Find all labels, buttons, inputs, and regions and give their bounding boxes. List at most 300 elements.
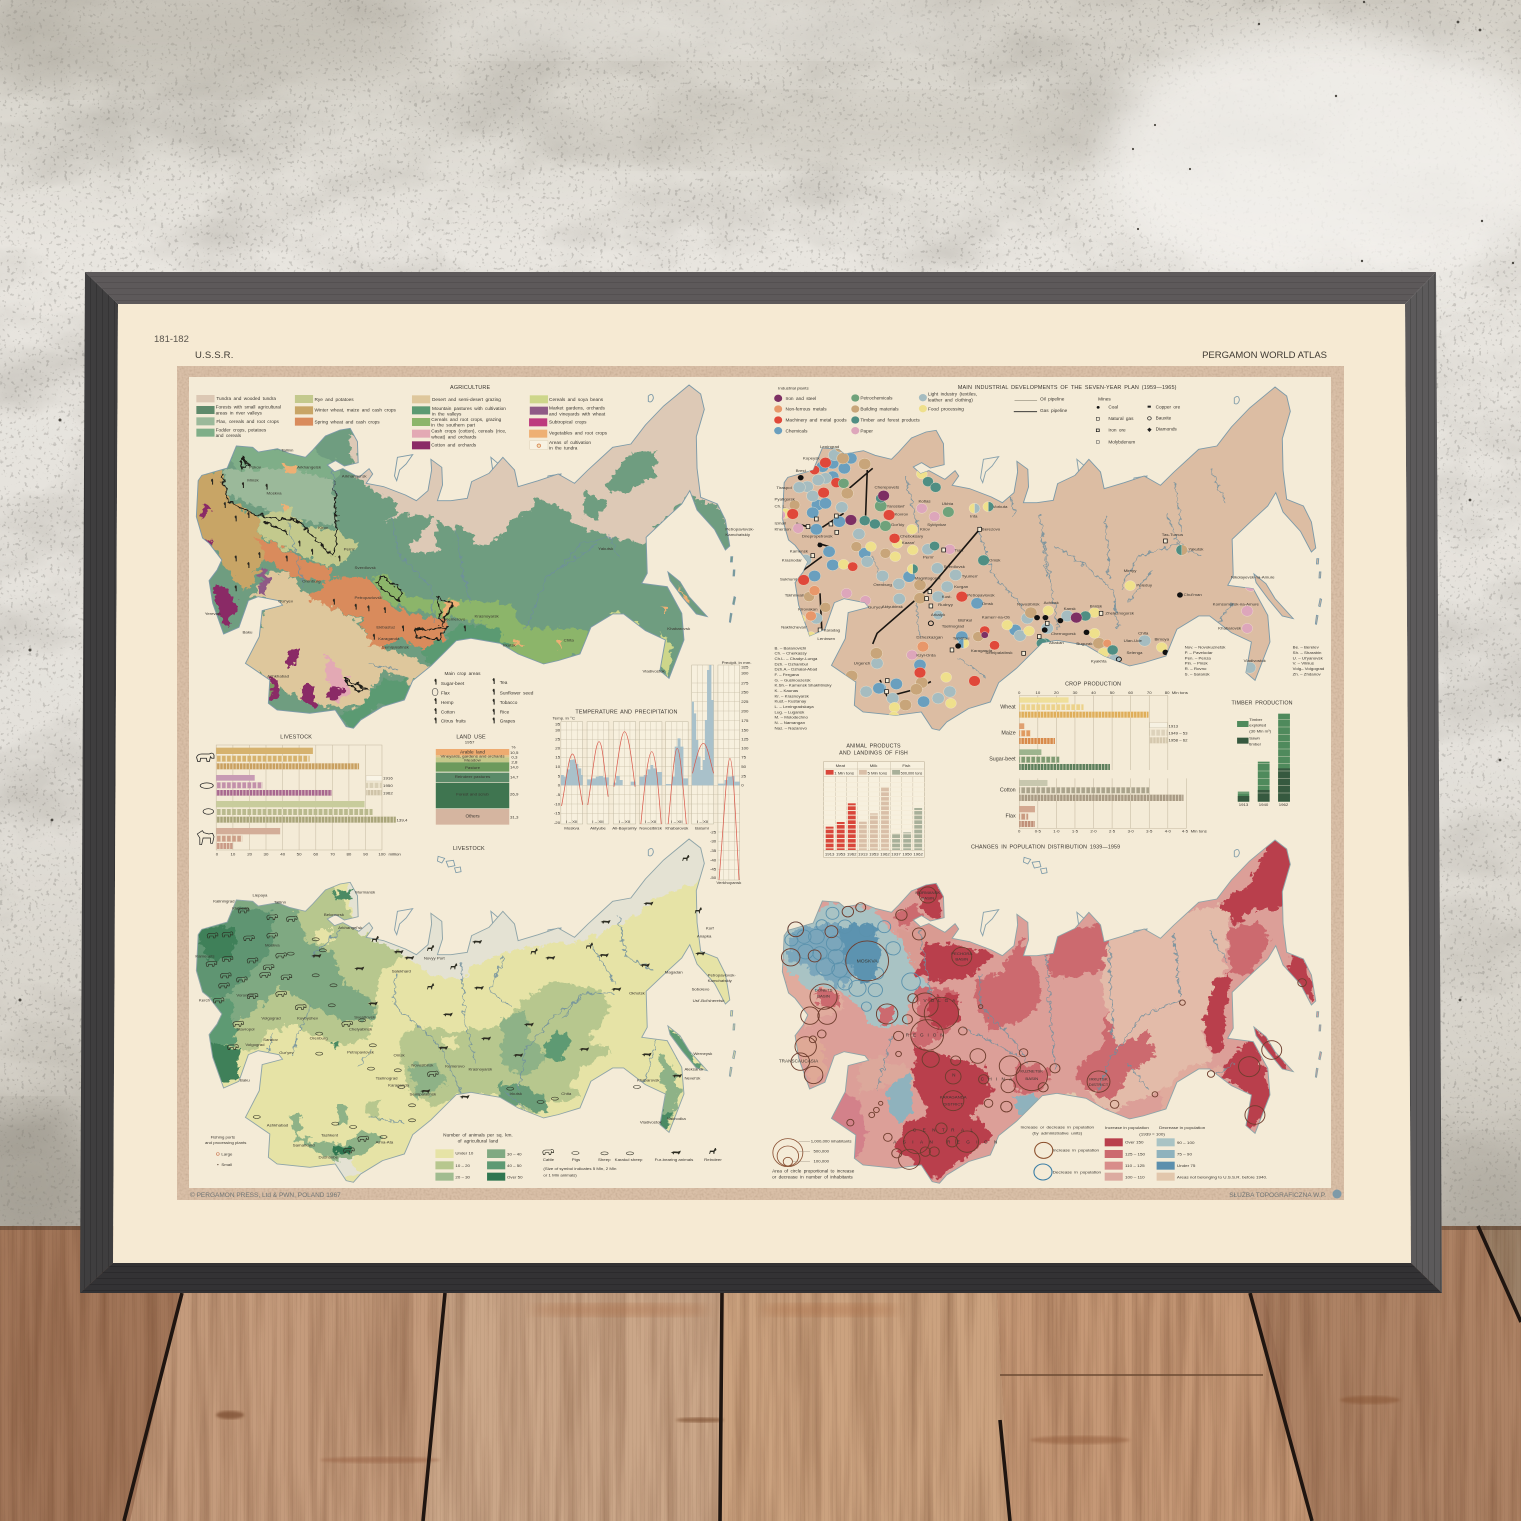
city labels: Syktyvkar (927, 522, 947, 527)
city labels: Temirtau (953, 635, 970, 640)
bar chart: animal products: 500,000 tons (901, 771, 922, 775)
climate charts: Ali-Bayramly (612, 826, 638, 831)
city labels: Saratov (263, 1037, 279, 1042)
crop symbol key: Sunflower seed (500, 691, 534, 696)
city labels: Ch. L. (775, 503, 786, 508)
legend: industrial plants (774, 386, 1181, 444)
climate charts: -40 (710, 857, 717, 862)
country heading: U.S.S.R. (195, 350, 234, 361)
city labels: Volgograd (261, 1015, 281, 1020)
city labels: Kopeysk (803, 456, 821, 460)
bar chart: crop production: Maize (1001, 731, 1016, 737)
legend: circle sizes: or decrease in number of inhabitants (772, 1175, 854, 1180)
bar chart: animal products: 1950 (902, 851, 913, 856)
legend: animals per sq km (435, 1133, 523, 1181)
agriculture legend: Winter wheat, maize and cash crops (315, 408, 397, 413)
climate charts: 175 (741, 718, 749, 723)
city labels: Tselinograd (942, 623, 965, 628)
agriculture city labels: Yakutsk (598, 546, 614, 551)
city labels: Belomorsk (324, 912, 345, 917)
bar chart: livestock: 90 (363, 852, 369, 857)
abbreviations list right: Volg– Volgograd (1293, 666, 1325, 671)
bar chart: animal products: Fish (902, 763, 911, 768)
agriculture city labels: Krasnoyarsk (475, 613, 500, 618)
city labels: Petropavlovsk (347, 1049, 375, 1054)
city labels: Bratsk (1090, 603, 1103, 608)
abbreviations list right (1185, 645, 1325, 676)
city labels: Kotlas (919, 498, 931, 503)
legend: animals per sq km: of agricultural land (458, 1139, 499, 1143)
city labels: Bishkul (958, 618, 972, 623)
bar chart: animal products: 1937 (891, 851, 902, 856)
city labels: Nakhodka (667, 1116, 687, 1121)
climate charts: 275 (741, 681, 749, 685)
picture frame (80, 272, 1442, 1293)
legend: industrial plants: Diamonds (1156, 427, 1178, 432)
heading: population changes: CHANGES IN POPULATION DISTRIBUTION 1939—1959 (971, 845, 1120, 851)
city labels: Kansk (1064, 606, 1077, 611)
city labels: Dushanbe (319, 1154, 339, 1159)
city labels: Vladivostok (640, 1119, 663, 1124)
legend: industrial plants: Chemicals (785, 429, 808, 433)
legend: animals per sq km: 30 – 40 (507, 1152, 522, 1156)
fishing ports key: Small (221, 1162, 232, 1167)
agriculture city labels: Ekibastuz (376, 624, 395, 629)
bar chart: livestock: million (389, 852, 402, 857)
heading: livestock chart: LIVESTOCK (280, 735, 312, 740)
legend: population change colours: Increase in population (1105, 1125, 1150, 1130)
stacked chart: land use: Forest and scrub (456, 792, 490, 797)
agriculture regions (196, 386, 735, 728)
stacked chart: land use: 14,7 (510, 775, 519, 779)
bar chart: animal products: 1962 (880, 851, 890, 856)
city labels: Perm' (923, 554, 934, 559)
legend: animals per sq km: 20 – 30 (455, 1175, 471, 1179)
agriculture legend: Forests with small agricultural (216, 405, 281, 410)
city labels: Ashkhabad (267, 1123, 289, 1128)
city labels: Karaganda (388, 1083, 410, 1088)
city labels: Ust'-Bol'sheretsk (693, 998, 725, 1003)
agriculture legend (196, 395, 608, 450)
city labels: Korf (706, 925, 715, 930)
city labels: Karaganda (971, 648, 993, 653)
city labels: Salekhard (392, 969, 412, 974)
legend: industrial plants: leather and clothing) (928, 398, 973, 402)
paper mat (113, 304, 1411, 1263)
city labels: Bugurak (1076, 641, 1093, 646)
bar chart: crop production: 4·0 (1165, 829, 1172, 834)
stacked chart: land use: Pasture (465, 765, 481, 770)
abbreviations list left: G. – Gusinoozersk (775, 677, 812, 682)
agriculture city labels: Pskov (249, 465, 262, 469)
legend: industrial plants: Building materials (860, 407, 899, 412)
icon: pig (200, 783, 213, 788)
legend: industrial plants: Paper (860, 429, 873, 433)
legend: population change colours: Decrease in population (1159, 1125, 1206, 1130)
agriculture city labels: Kirov (318, 525, 329, 530)
stacked chart: land use: 10,5 (510, 750, 519, 755)
bar chart: timber production: exploited (1249, 723, 1267, 728)
agriculture legend: Tundra and wooded tundra (216, 396, 276, 401)
legend: animal symbols: Fur-bearing animals (655, 1157, 693, 1162)
legend: population change colours: (1939 = 100) (1139, 1132, 1166, 1136)
climate charts: 150 (741, 728, 749, 732)
agriculture city labels: Vladivostok (642, 668, 666, 673)
city labels: Okhotsk (629, 990, 646, 995)
city labels: Komsomol'sk-na-Amure (1213, 601, 1260, 606)
city labels: Kirovakan (798, 607, 818, 612)
heading: animal products: AND LANDINGS OF FISH (839, 751, 908, 757)
region labels: CENTRAL (913, 1128, 979, 1133)
abbreviations list left: K. – Kaunas (775, 688, 798, 693)
legend: animal symbols: (Size of symbol indicates 5 Mln, 2 Mln (543, 1166, 617, 1171)
climate charts: Temp. in °C (553, 716, 575, 720)
city labels: Krasnoyarsk (468, 1067, 493, 1072)
stacked chart: land use: % (512, 745, 516, 749)
climate charts: Verkhoyansk (716, 880, 742, 885)
city labels: Kurgan (954, 584, 969, 589)
city labels: Cherepovets (875, 485, 899, 490)
legend: industrial plants: Bauxite (1156, 416, 1172, 421)
bar chart: crop production: 4·5 (1182, 829, 1189, 834)
agriculture city labels: Petropavlovsk (355, 595, 383, 600)
city labels: Izmail (775, 520, 786, 525)
agriculture city labels: Khabarovsk (667, 626, 691, 631)
heading: animal products (839, 743, 908, 757)
city labels: Kirov (920, 527, 931, 532)
bar chart: livestock: 1962 (383, 790, 393, 795)
city labels: Tashkent (321, 1133, 339, 1138)
climate charts: -45 (710, 867, 717, 872)
bar chart: timber production: timber (1249, 741, 1262, 746)
crop symbol key: Tea (500, 680, 508, 685)
climate charts: -15 (554, 811, 561, 816)
climate charts: 0 (558, 783, 561, 788)
agriculture legend: and cereals (216, 433, 242, 438)
bar chart: crop production: 3·0 (1128, 829, 1134, 834)
bar chart: timber production: Timber (1249, 717, 1263, 722)
city labels: Zheleznogorsk (1105, 611, 1135, 616)
heading: animal products: ANIMAL PRODUCTS (846, 743, 901, 749)
city labels: Kazan' (902, 540, 915, 545)
legend: animals per sq km: Number of animals per sq. km. (443, 1133, 513, 1138)
bar chart: crop production: Cotton (1000, 788, 1016, 794)
legend: animal symbols: Karakul sheep (615, 1157, 643, 1162)
abbreviations list right: S. – Saransk (1185, 671, 1211, 676)
city labels: Novosibirsk (411, 1063, 434, 1068)
icon: survey emblem (1332, 1190, 1342, 1198)
agriculture city labels: Arkhangel'sk (342, 474, 368, 479)
agriculture legend: Spring wheat and cash crops (315, 420, 380, 424)
agriculture legend: Areas of cultivation (549, 440, 592, 445)
abbreviations list left: Naz. – Nazarovo (775, 725, 808, 730)
city labels: Gur'yev (868, 605, 884, 610)
wooden floor (0, 1226, 1521, 1521)
city labels: Vladivostok (1244, 658, 1267, 663)
abbreviations list left (775, 645, 833, 730)
city labels: Chita (1138, 630, 1149, 635)
city labels: Karadag (824, 627, 841, 632)
legend: industrial plants: Mines (1098, 397, 1111, 402)
climate charts: I – XII (566, 819, 577, 824)
bar chart: crop production (989, 690, 1207, 834)
city labels: Abakan (1049, 640, 1065, 645)
agriculture city labels: Irkutsk (503, 643, 517, 648)
legend: population change colours: 125 – 150 (1125, 1152, 1146, 1156)
panel: livestock map (196, 838, 736, 1183)
city labels: Dnepropetrovsk (802, 534, 833, 539)
region labels: DISTRICT (943, 1101, 964, 1106)
panel: agriculture map (180, 370, 762, 737)
bar chart: livestock: 100 (378, 852, 386, 857)
abbreviations list left: B. – Baranovichi (775, 645, 806, 650)
agriculture legend: in the southern part (431, 423, 476, 428)
bar chart: livestock: 60 (313, 852, 319, 857)
abbreviations list left: F. – Fergana (775, 672, 800, 677)
legend: administrative increase or decrease (1020, 1125, 1102, 1180)
city labels: Sobolevo (692, 987, 710, 992)
abbreviations list left: L. – Leningradskaya (775, 704, 814, 709)
city labels: Kamen'-na-Ob (982, 615, 1011, 620)
city labels: Kherson (775, 527, 791, 532)
climate charts: I – XII (619, 819, 630, 824)
city labels: Ulan-Ude (1124, 638, 1143, 643)
legend: animals per sq km: Under 10 (455, 1151, 474, 1156)
decrease circles (785, 907, 920, 1011)
region labels: KARAGANDA (940, 1095, 967, 1100)
bar chart: crop production: Flax (1006, 814, 1016, 820)
islands (395, 848, 653, 939)
legend: animal symbols: Cattle (543, 1157, 555, 1162)
land base (782, 387, 1322, 730)
city labels: Khabarovsk (637, 1078, 660, 1083)
agriculture legend: wheat) and orchards (431, 435, 477, 439)
climate charts: 50 (741, 764, 747, 769)
legend: industrial plants: Gas pipeline (1040, 408, 1068, 413)
city labels: Ukhta (942, 501, 954, 506)
climate charts: Precipit. in mm. (722, 660, 752, 665)
region labels: REGION (906, 1033, 948, 1038)
cartographer line: SŁUŻBA TOPOGRAFICZNA W.P. (1229, 1190, 1326, 1199)
agriculture legend: and vineyards with wheat (549, 412, 606, 416)
legend: circle sizes: 500,000 (814, 1149, 830, 1154)
city labels: Orenburg (873, 582, 893, 587)
legend: industrial plants: Machinery and metal goods (785, 418, 847, 423)
region labels (779, 890, 1109, 1144)
city labels: Anapka (697, 933, 712, 938)
climate charts: 250 (741, 690, 749, 695)
city labels: Arkhangel'sk (338, 925, 363, 930)
city labels: Gor'kiy (891, 522, 905, 527)
heading: timber production: TIMBER PRODUCTION (1232, 700, 1293, 706)
legend: animal symbols: Sheep (598, 1157, 611, 1162)
bar chart: crop production: 0 (1018, 829, 1021, 834)
stacked chart: land use (436, 745, 519, 825)
city labels: Kuybyshev (297, 1015, 319, 1020)
map heading: MAIN INDUSTRIAL DEVELOPMENTS OF THE SEVEN-YEAR PLAN (1959—1965) (958, 385, 1177, 391)
heading: temperature and precipitation: TEMPERATURE AND PRECIPITATION (575, 710, 678, 715)
abbreviations list right: Zh. – Zhdanov (1293, 671, 1322, 676)
bar chart: animal products: 1 Mln tons (834, 770, 854, 775)
city labels: Tskhinvali (785, 593, 804, 598)
plant circles (775, 441, 1257, 727)
climate charts: -5 (556, 792, 561, 797)
legend: circle sizes: 1,000,000 inhabitants (811, 1139, 851, 1144)
fishing ports key: and processing plants (205, 1140, 246, 1145)
agriculture city labels: Arkhangelsk (297, 465, 322, 470)
city labels: Novosibirsk (1017, 601, 1040, 606)
abbreviations list left: Lug. – Lugansk (775, 709, 805, 714)
region labels: ASIAN REGION (893, 1139, 1004, 1144)
climate charts: 225 (741, 699, 749, 704)
city labels: Magadan (665, 969, 683, 974)
agriculture legend: Cereals and soya beans (549, 397, 604, 402)
panel: population map (782, 840, 1322, 1184)
agriculture city labels: Baku (243, 629, 253, 634)
city labels: Stavropol (236, 1027, 255, 1032)
bar chart: crop production: 10 (1035, 690, 1041, 695)
bar chart: livestock: 40 (280, 852, 286, 857)
agriculture legend: areas in river valleys (216, 411, 263, 415)
city labels: Bimoya (1155, 637, 1170, 642)
agriculture city labels: Kamchatskiy (725, 532, 751, 537)
abbreviations list right: V. – Vilnius (1293, 661, 1314, 666)
city labels: Sverdlovsk (944, 564, 966, 569)
city labels: Tallinn (274, 899, 287, 904)
city labels: Klaipeda (232, 905, 249, 910)
climate charts: -20 (554, 820, 561, 825)
city labels: Omsk (393, 1053, 406, 1058)
bar chart: crop production: 50 (1110, 690, 1115, 695)
agriculture city labels: Minsk (247, 478, 260, 483)
legend: population change colours (1105, 1125, 1267, 1181)
abbreviations list left: Dzh. – Dzhambul (775, 661, 808, 666)
bar chart: crop production: 2·0 (1090, 829, 1097, 834)
city labels: Aktyubinsk (882, 604, 904, 609)
region labels: N (952, 1073, 959, 1078)
city labels: Dzhezkazgan (916, 635, 943, 640)
climate charts (553, 660, 752, 885)
city labels: Tyumen' (962, 573, 978, 578)
city labels: Volgograd (245, 1042, 265, 1047)
bar chart: livestock: 30 (264, 852, 269, 857)
city labels: Pyatigorsk (775, 497, 796, 502)
city labels: Vorkuta (993, 504, 1008, 509)
bar chart: animal products: 5 Mln tons (867, 770, 887, 775)
legend: animal symbols (543, 1148, 722, 1178)
climate charts: 325 (741, 665, 749, 670)
city labels: Nevel'sk (684, 1075, 701, 1080)
stacked chart: land use: Meadow (464, 758, 482, 763)
legend: animals per sq km: 10 – 20 (455, 1163, 471, 1168)
bar chart: crop production: 2·5 (1109, 829, 1116, 834)
legend: industrial plants: Molybdenum (1108, 440, 1136, 444)
bar chart: crop production: 1·5 (1072, 829, 1079, 834)
region labels: BASIN (817, 993, 830, 998)
agriculture city labels: Perm' (344, 547, 355, 552)
crop symbol key: Rice (500, 710, 510, 715)
climate charts: 30 (555, 728, 561, 732)
panel: lower-right charts (824, 682, 1293, 857)
region labels: MURMANSK (915, 890, 941, 895)
stacked chart: land use: 2,8 (511, 760, 518, 764)
city labels: Yakutsk (1188, 547, 1204, 552)
crop symbol key: Hemp (441, 700, 454, 705)
bar chart: timber production: Sawn (1249, 736, 1261, 741)
agriculture legend: Market gardens, orchards (549, 406, 606, 411)
climate charts: 200 (741, 709, 749, 713)
city labels: Kyakhta (1091, 658, 1107, 663)
bar chart: animal products: 1913 (825, 851, 835, 856)
city labels: Tura (955, 547, 964, 552)
bar chart: crop production: 3·5 (1146, 829, 1153, 834)
stacked chart: land use: Arable land (460, 750, 485, 754)
bar chart: animal products: Meat (836, 763, 846, 768)
heading: crop production: CROP PRODUCTION (1065, 682, 1121, 688)
agriculture legend: Mountain pastures with cultivation (432, 406, 506, 411)
bar chart: timber production: 1940 (1259, 802, 1269, 807)
city labels: Kamchatskiy (708, 978, 733, 983)
legend: industrial plants: Oil pipeline (1040, 397, 1065, 402)
agriculture legend: Cereals and root crops, grazing (431, 417, 502, 422)
legend: circle sizes: 100,000 (814, 1159, 830, 1164)
page number: 181-182 (154, 334, 189, 345)
bar chart: livestock: 0 (216, 852, 219, 857)
city labels: Petropavlovsk- (708, 973, 736, 978)
legend: administrative increase or decrease: Increase in population (1053, 1148, 1100, 1153)
copyright line: © PERGAMON PRESS, Ltd & PWN, POLAND 1967 (190, 1191, 341, 1199)
icon: horse (197, 831, 214, 845)
city labels: Kemerovo (445, 1063, 465, 1068)
bar chart: crop production: 70 (1147, 690, 1152, 695)
bar chart: crop production: Sugar-beet (989, 757, 1016, 763)
abbreviations list left: N. – Namangan (775, 720, 806, 725)
legend: industrial plants: Industrial plants (778, 386, 809, 390)
agriculture legend: Fodder crops, potatoes (216, 428, 267, 432)
abbreviations list left: Dzh.A.– Dzhalal-Abad (775, 667, 818, 672)
region labels: DONETS (815, 987, 833, 992)
fishing ports key (205, 1134, 246, 1167)
heading: lower-left map: LIVESTOCK (453, 846, 485, 852)
city labels: Peleduy (1136, 583, 1153, 588)
agriculture city labels: Orenburg (302, 579, 321, 584)
region labels: IRKUTSK (1089, 1077, 1108, 1082)
population map circles, labels and legend (772, 845, 1306, 1180)
stacked chart: land use: 31,3 (510, 814, 519, 819)
population regions (782, 841, 1322, 1183)
bar chart: animal products (824, 762, 924, 857)
crop symbol key: Main crop areas (445, 671, 481, 676)
panel: lower-left charts and crop key (197, 660, 752, 885)
legend: industrial plants: Timber and forest products (860, 418, 920, 423)
city labels: Berezovo (982, 527, 1001, 532)
city labels: Irkutsk (510, 1091, 523, 1096)
city labels: Urgench (854, 661, 871, 666)
abbreviations list right: Be. – Berelev (1293, 645, 1320, 650)
bar chart: timber production: 1913 (1239, 802, 1249, 807)
bar chart: crop production: 1949 – 53 (1169, 730, 1188, 735)
agriculture city labels: Kemerovo (445, 617, 466, 622)
climate charts: I – XII (697, 819, 708, 824)
climate charts: 15 (555, 755, 561, 760)
agriculture legend: Vegetables and root crops (549, 431, 608, 436)
climate charts: 5 (558, 774, 561, 778)
abbreviations list left: K.Sh.– Kamensk Shakhtinsky (775, 683, 833, 688)
legend: administrative increase or decrease: (by administrative units) (1032, 1131, 1083, 1136)
abbreviations list left: Kust.– Kustanay (775, 699, 807, 704)
city labels (195, 889, 736, 1159)
region labels: DISTRICT (1089, 1082, 1109, 1087)
